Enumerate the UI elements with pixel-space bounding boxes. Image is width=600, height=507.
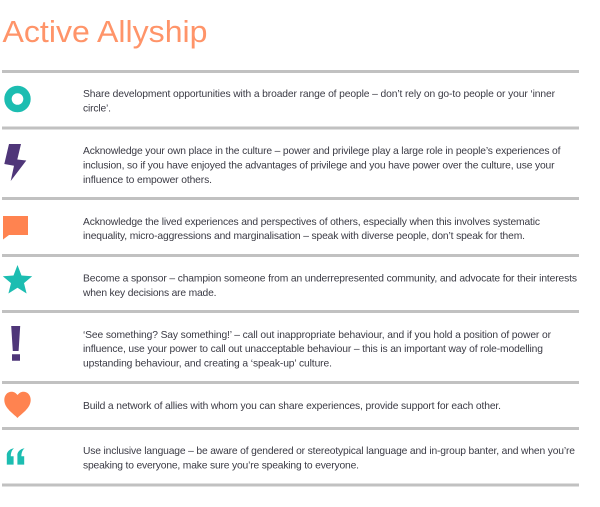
icon: purple lightning bolt [4, 144, 26, 181]
text: become a sponsor: Become a sponsor – champion someone from an underrepresented community, and advocate for their interests [83, 274, 577, 285]
title: Active Allyship [2, 14, 208, 49]
text: lived experiences: inequality, micro-aggressions and marginalisation – speak with diverse people, don’t speak for them. [83, 231, 525, 242]
text: share development opportunities [83, 89, 556, 114]
text: become a sponsor: when key decisions are made. [82, 288, 216, 299]
text: see something say something [83, 330, 552, 370]
text: see something say something: upstanding behaviour, and creating a ‘speak-up’ culture. [83, 359, 332, 370]
icon: orange speech bubble [3, 216, 28, 240]
text: inclusive language [83, 446, 575, 472]
text: share development opportunities: circle’. [83, 103, 111, 114]
text: acknowledge your place: influence to empower others. [83, 175, 212, 186]
text: lived experiences: Acknowledge the lived experiences and perspectives of others, especially when this involves systematic [83, 217, 540, 228]
text: become a sponsor [82, 274, 577, 299]
icon: teal quotation marks [7, 448, 25, 465]
icon: orange heart [4, 392, 31, 418]
text: see something say something: influence, use your power to call out unacceptable behaviour – this is an important way of role-modelling [83, 344, 543, 355]
text: lived experiences [83, 217, 540, 242]
icon: purple exclamation mark [11, 326, 20, 361]
icon: teal ring [8, 90, 27, 108]
text: inclusive language: Use inclusive language – be aware of gendered or stereotypical language and in-group banter, and when you’re [83, 446, 575, 457]
icon: teal star [3, 265, 32, 294]
text: share development opportunities: Share development opportunities with a broader range of people – don’t rely on go-to people or your ‘inner [83, 89, 556, 100]
text: build a network: Build a network of allies with whom you can share experiences, provide support for each other. [83, 401, 501, 412]
text: inclusive language: speaking to everyone, make sure you’re speaking to everyone. [83, 461, 359, 472]
text: acknowledge your place: inclusion, so if you have enjoyed the advantages of privilege and you have power over the culture, use your [83, 161, 555, 172]
text: acknowledge your place: Acknowledge your own place in the culture – power and privilege play a large role in people’s experiences of [83, 146, 561, 157]
text: acknowledge your place [83, 146, 561, 186]
text: see something say something: ‘See something? Say something!’ – call out inappropriate behaviour, and if you hold a position of power or [83, 330, 552, 341]
